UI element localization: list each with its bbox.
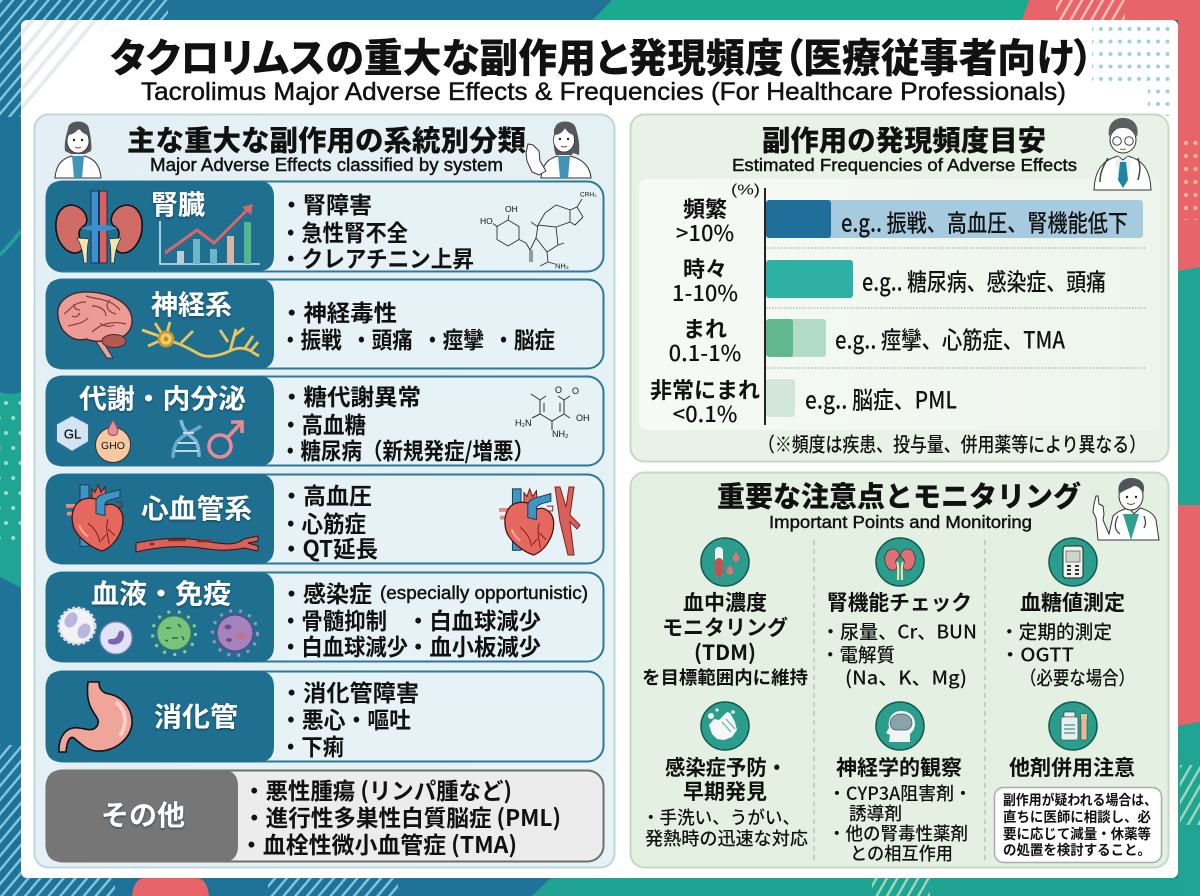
bar: rare: まれ bbox=[683, 312, 727, 344]
icon: DNA bbox=[173, 420, 201, 458]
icon: green virus bbox=[152, 612, 196, 654]
panel row: cardiovascular bbox=[46, 474, 604, 564]
molecule: tacrolimus fragment: HO bbox=[480, 216, 493, 226]
bar: rare: 0.1-1% bbox=[669, 336, 741, 368]
subtitle: Tacrolimus Major Adverse Effects & Frequencies (For Healthcare Professionals) bbox=[141, 78, 1066, 106]
text: neurological observation bbox=[828, 752, 972, 866]
text: blood effects bbox=[280, 575, 588, 662]
text: neurologic effects: ・振戦 ・頭痛 ・痙攣 ・脳症 bbox=[280, 321, 555, 355]
item: blood glucose bbox=[1000, 538, 1135, 690]
text: neurological observation: 誘導剤 bbox=[849, 800, 902, 826]
bar: occasional: 1-10% bbox=[672, 276, 738, 308]
text: TDM: (TDM) bbox=[694, 637, 756, 667]
heading: monitoring: 重要な注意点とモニタリング bbox=[717, 474, 1081, 516]
text: other effects: ・悪性腫瘍 (リンパ腫など) bbox=[243, 772, 512, 806]
text: digestive effects: ・下痢 bbox=[280, 728, 344, 762]
molecule: small ring: H₂N bbox=[515, 418, 532, 428]
item: concomitant drugs bbox=[994, 702, 1162, 862]
text: TDM bbox=[642, 587, 808, 690]
bar: very rare: 非常にまれ bbox=[650, 373, 760, 405]
text: infection prevention bbox=[642, 752, 808, 851]
text: metabolic effects: ・高血糖 bbox=[280, 406, 366, 440]
icon: female doctor waving bbox=[526, 122, 591, 178]
text: renal function: 腎機能チェック bbox=[827, 587, 972, 617]
bar: rare bbox=[669, 312, 1065, 368]
icon: test tube and drops bbox=[701, 538, 749, 586]
bar: very rare bbox=[650, 373, 957, 429]
text: renal function bbox=[821, 587, 977, 690]
text: metabolic effects: ・糖尿病（新規発症/増悪） bbox=[280, 432, 534, 466]
text: metabolic effects bbox=[280, 378, 534, 466]
molecule: small ring: NH₂ bbox=[552, 429, 569, 439]
text: other effects: ・血栓性微小血管症 (TMA) bbox=[240, 826, 517, 860]
icon: blood vessel bbox=[136, 536, 258, 552]
item: infection prevention bbox=[642, 702, 808, 851]
bar: frequent: e.g.. 振戦、高血圧、腎機能低下 bbox=[841, 204, 1128, 238]
text: cardiovascular effects: ・高血圧 bbox=[280, 477, 372, 511]
text: kidney effects: ・クレアチニン上昇 bbox=[280, 240, 474, 274]
text: blood effects: ・骨髄抑制 bbox=[280, 602, 387, 636]
icon: female doctor left bbox=[55, 122, 101, 178]
bar: occasional: e.g.. 糖尿病、感染症、頭痛 bbox=[862, 262, 1106, 298]
icon: neuron bbox=[142, 322, 259, 356]
label: digestive: 消化管 bbox=[154, 696, 238, 734]
text: TDM: モニタリング bbox=[662, 612, 788, 642]
icon: head with brain bbox=[876, 702, 924, 750]
item: TDM bbox=[642, 538, 808, 690]
text: kidney effects bbox=[280, 186, 474, 274]
molecule: small ring bbox=[515, 385, 590, 439]
text: blood effects: ・白血球減少 bbox=[280, 628, 408, 662]
text: renal function: (Na、K、Mg) bbox=[845, 664, 967, 690]
panel row: other bbox=[46, 770, 604, 862]
icon: monocyte bbox=[100, 622, 132, 654]
label: other: その他 bbox=[101, 794, 185, 834]
panel: frequency chart bbox=[630, 114, 1168, 462]
panel: adverse effects by system bbox=[34, 114, 614, 868]
icon: rising chart bbox=[160, 204, 260, 264]
text: blood glucose: ・定期的測定 bbox=[1000, 618, 1112, 644]
text: neurological observation: 神経学的観察 bbox=[836, 752, 962, 782]
icon: kidneys bbox=[56, 191, 142, 263]
callout: consult physician: の処置を検討すること。 bbox=[1003, 840, 1151, 860]
bar: occasional: 時々 bbox=[683, 252, 727, 284]
icon: male symbol bbox=[209, 422, 242, 457]
molecule: tacrolimus fragment: OH bbox=[505, 204, 518, 214]
text: infection prevention: 発熱時の迅速な対応 bbox=[645, 825, 808, 851]
bar: frequent: >10% bbox=[676, 216, 734, 248]
callout: consult physician bbox=[994, 788, 1162, 862]
text: cardiovascular effects: ・心筋症 bbox=[280, 505, 366, 539]
bar: frequent: 頻繁 bbox=[683, 192, 727, 224]
text: infection prevention: ・手洗い、うがい、 bbox=[642, 804, 800, 830]
icon: GHO drop bbox=[96, 420, 130, 462]
label: nervous system: 神経系 bbox=[151, 284, 232, 322]
panel row: blood and immunity bbox=[46, 572, 604, 662]
icon: kidneys circle bbox=[876, 538, 924, 586]
bar chart bbox=[639, 179, 1160, 430]
heading: by system: 主な重大な副作用の系統別分類 bbox=[127, 118, 526, 160]
text: neurologic effects bbox=[280, 294, 555, 355]
text: other effects bbox=[240, 772, 561, 860]
text: renal function: ・尿量、Cr、BUN bbox=[821, 618, 977, 644]
label: kidney: 腎臓 bbox=[151, 184, 205, 222]
text: blood effects: ・血小板減少 bbox=[407, 628, 541, 662]
text: TDM: 血中濃度 bbox=[683, 587, 767, 617]
subheading: frequency: Estimated Frequencies of Adverse Effects bbox=[732, 155, 1077, 175]
text: concomitant drugs: 他剤併用注意 bbox=[1009, 752, 1135, 782]
panel row: nervous system bbox=[46, 279, 604, 369]
icon: hand washing bbox=[701, 702, 749, 750]
text: neurological observation: ・CYP3A阻害剤・ bbox=[828, 780, 972, 806]
text: metabolic effects: ・糖代謝異常 bbox=[280, 378, 421, 412]
label: metabolic: 代謝・内分泌 bbox=[79, 378, 246, 416]
molecule: small ring: OH bbox=[576, 413, 590, 423]
bar: rare: e.g.. 痙攣、心筋症、TMA bbox=[835, 320, 1065, 356]
molecule: small ring: O bbox=[555, 385, 562, 395]
bar: frequent bbox=[676, 192, 1143, 248]
text: kidney effects: ・急性腎不全 bbox=[280, 214, 408, 248]
heading: frequency: 副作用の発現頻度目安 bbox=[762, 118, 1046, 160]
bar: very rare: <0.1% bbox=[673, 397, 737, 429]
icon: glucose meter bbox=[1049, 538, 1097, 586]
icon: heart and artery bbox=[499, 487, 580, 555]
text: neurologic effects: ・神経毒性 bbox=[280, 294, 397, 328]
text: TDM: を目標範囲内に維持 bbox=[642, 664, 808, 690]
text: infection prevention: 感染症予防・ bbox=[665, 752, 787, 782]
text: renal function: ・電解質 bbox=[821, 640, 895, 668]
text: infection prevention: 早期発見 bbox=[683, 776, 767, 806]
icon: white blood cell bbox=[59, 608, 95, 644]
molecule: tacrolimus fragment: NH₂ bbox=[555, 262, 569, 270]
decorative corners on sheet bbox=[21, 20, 1174, 116]
text: cardiovascular effects bbox=[280, 477, 378, 564]
bar chart: (%) bbox=[731, 182, 760, 198]
icon: medicine bottle bbox=[1049, 702, 1097, 750]
icon: brain bbox=[58, 292, 132, 358]
text: blood effects: (especially opportunistic) bbox=[380, 583, 588, 603]
text: cardiovascular effects: ・QT延長 bbox=[280, 530, 378, 564]
panel row: kidney bbox=[46, 181, 604, 274]
text: blood glucose: 血糖値測定 bbox=[1020, 587, 1125, 617]
panel row: metabolic and endocrine bbox=[46, 376, 604, 466]
icon: doctor pointing bbox=[1093, 478, 1159, 540]
molecule: tacrolimus fragment: CRH₂ bbox=[580, 192, 597, 198]
callout: consult physician: 副作用が疑われる場合は、 bbox=[1003, 790, 1157, 810]
callout: consult physician: 要に応じて減量・休薬等 bbox=[1003, 824, 1151, 844]
panel row: digestive bbox=[46, 671, 604, 762]
text: digestive effects: ・悪心・嘔吐 bbox=[280, 701, 411, 735]
icon: male doctor with glasses bbox=[1094, 118, 1151, 190]
subheading: by system: Major Adverse Effects classified by system bbox=[150, 155, 503, 175]
text: blood glucose: ・OGTT bbox=[1000, 640, 1074, 668]
icon: stomach bbox=[59, 682, 132, 752]
text: neurological observation: との相互作用 bbox=[850, 840, 953, 866]
panel: important points and monitoring bbox=[630, 472, 1168, 868]
title: タクロリムスの重大な副作用と発現頻度（医療従事者向け） bbox=[110, 26, 1093, 84]
text: other effects: ・進行性多巣性白質脳症 (PML) bbox=[243, 799, 561, 833]
callout: consult physician: 直ちに医師に相談し、必 bbox=[1003, 807, 1151, 827]
text: blood effects: ・感染症 bbox=[280, 575, 372, 609]
label: blood and immunity: 血液・免疫 bbox=[91, 572, 231, 612]
text: digestive effects: ・消化管障害 bbox=[280, 674, 419, 708]
molecule: tacrolimus fragment bbox=[480, 192, 597, 270]
text: blood glucose bbox=[1000, 587, 1135, 690]
label: cardiovascular: 心血管系 bbox=[141, 488, 252, 526]
text: neurological observation: ・他の腎毒性薬剤 bbox=[828, 820, 968, 846]
icon: purple virus bbox=[212, 610, 258, 656]
item: neurological observation bbox=[828, 702, 972, 866]
molecule: small ring: O bbox=[572, 386, 579, 396]
subheading: monitoring: Important Points and Monitoring bbox=[769, 512, 1032, 532]
text: blood effects: ・白血球減少 bbox=[407, 602, 541, 636]
text: blood glucose: （必要な場合） bbox=[1020, 664, 1135, 690]
icon: GL hexagon: GL bbox=[64, 426, 81, 442]
bar: very rare: e.g.. 脳症、PML bbox=[805, 380, 957, 416]
text: digestive effects bbox=[280, 674, 419, 762]
icon: GHO drop: GHO bbox=[101, 440, 125, 452]
bar: occasional bbox=[672, 252, 1106, 308]
icon: GL hexagon bbox=[56, 415, 89, 452]
icon: heart bbox=[66, 485, 123, 551]
item: renal function bbox=[821, 538, 977, 690]
text: kidney effects: ・腎障害 bbox=[280, 186, 372, 220]
